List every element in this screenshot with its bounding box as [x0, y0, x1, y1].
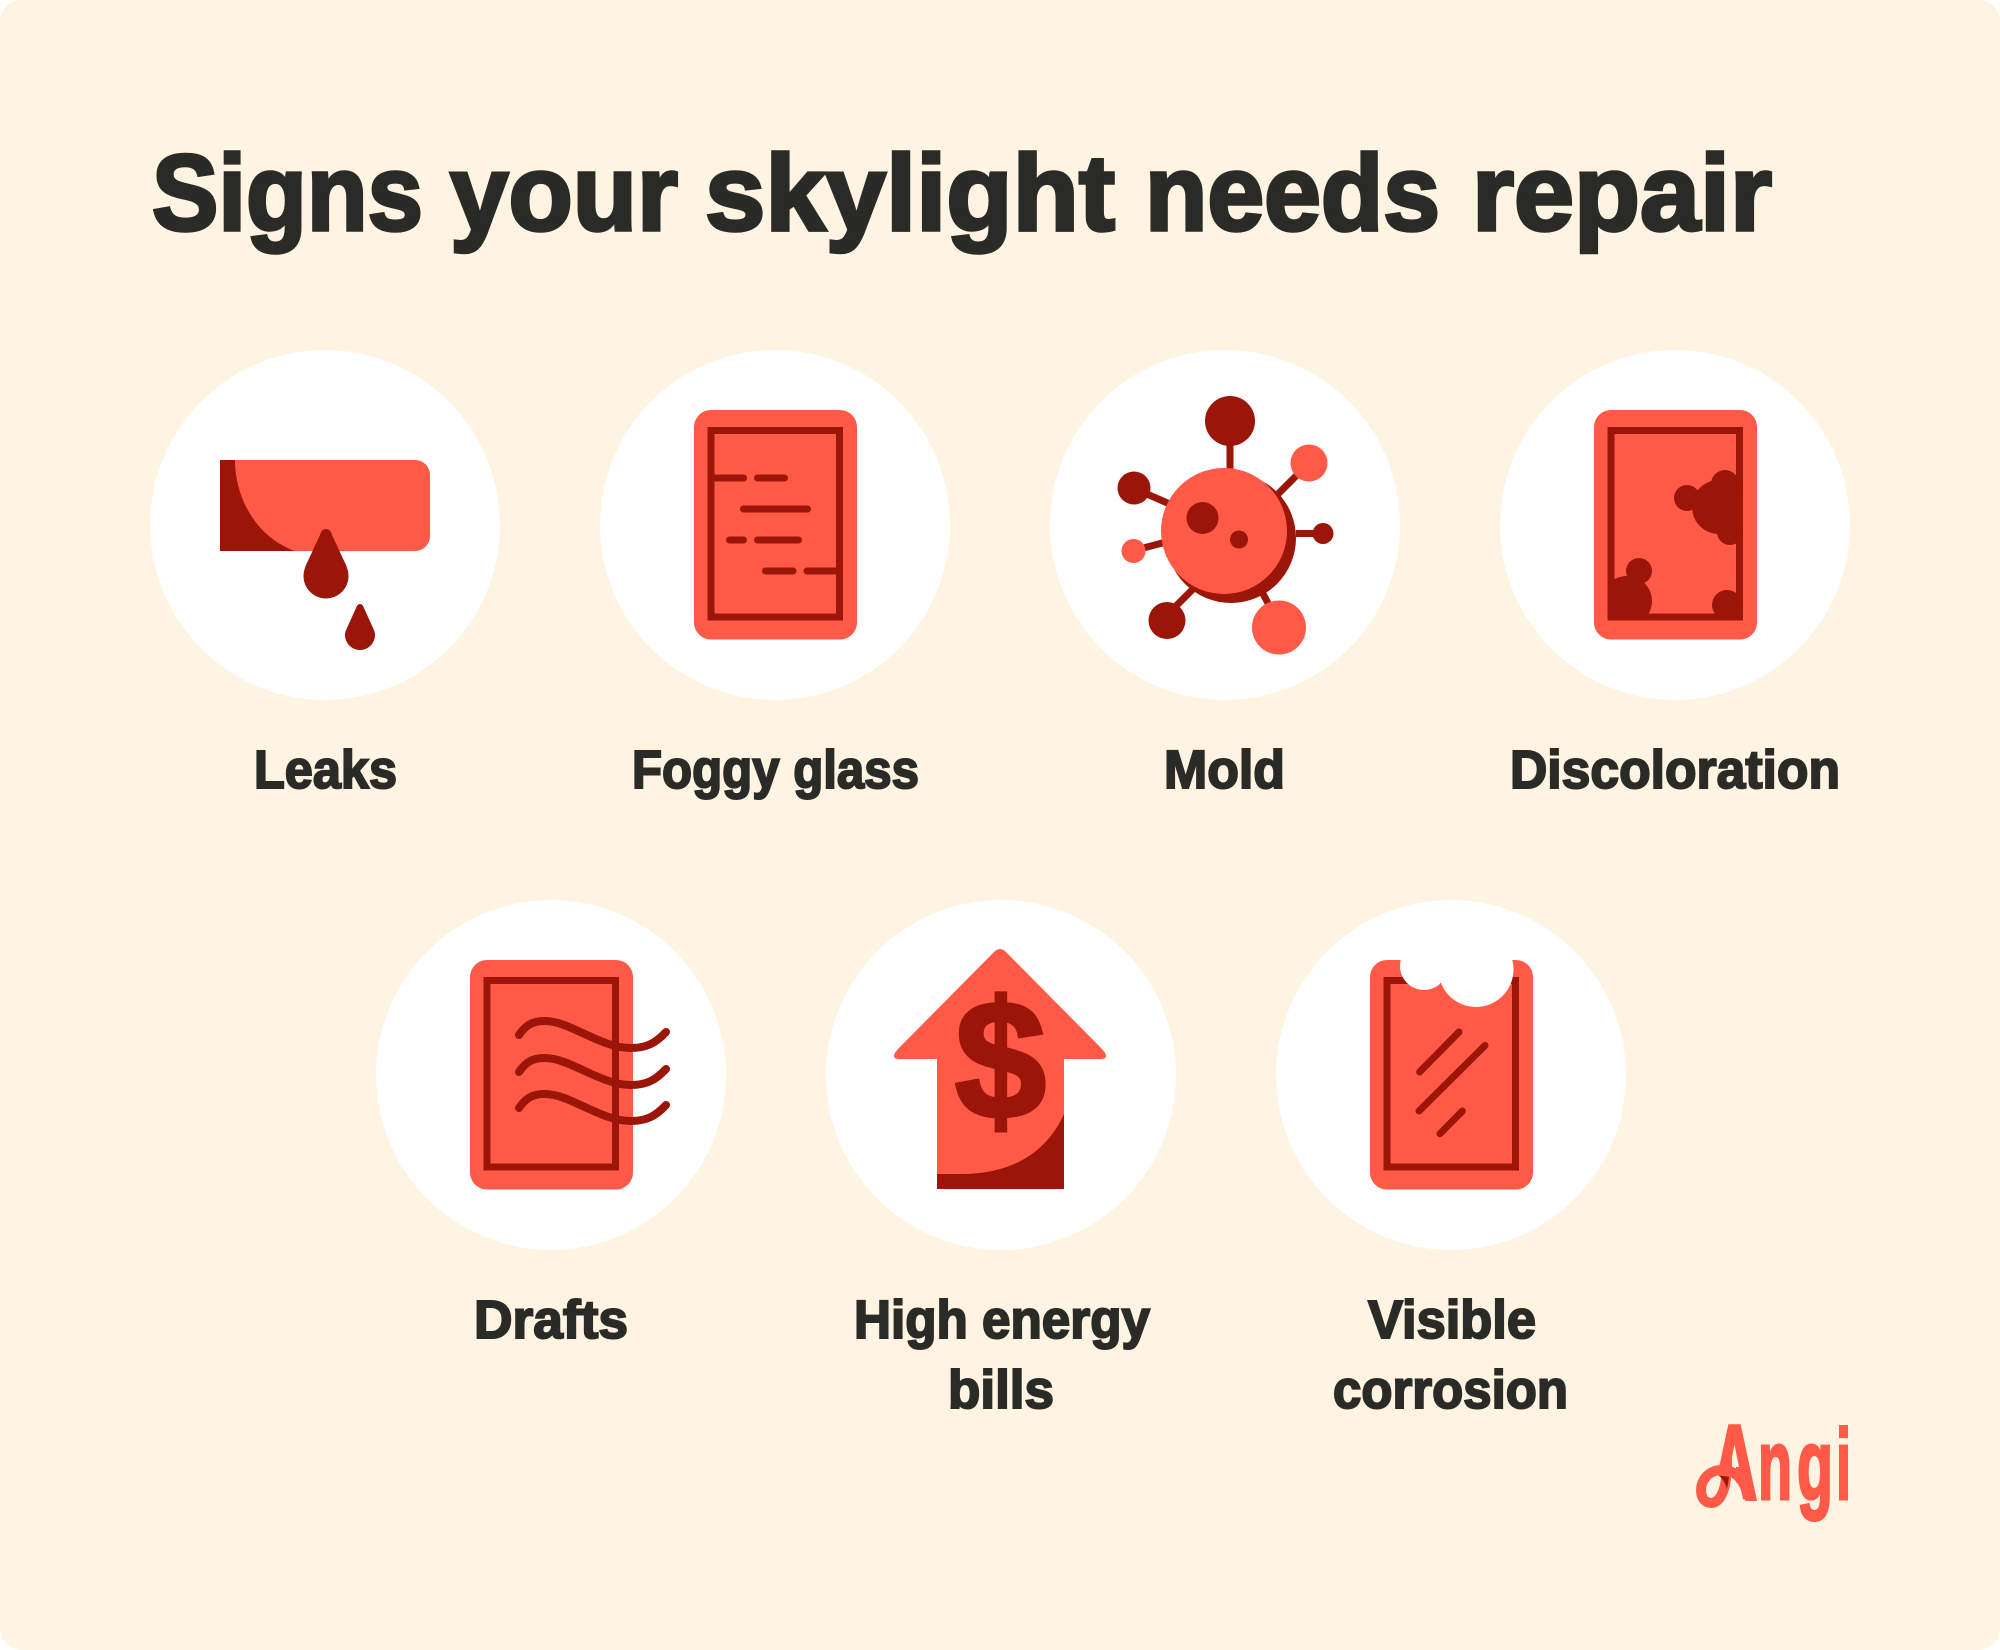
panel: mold	[1050, 350, 1400, 800]
icon circle: high energy bills	[826, 900, 1176, 1250]
icon: rising cost arrow	[894, 949, 1106, 1189]
panel: leaks	[150, 350, 500, 800]
label: visible corrosion: corrosion	[1333, 1360, 1568, 1420]
icon circle: leaks	[150, 350, 500, 700]
icon: discolored window	[1594, 410, 1757, 640]
title: Signs	[152, 132, 423, 253]
icon circle: visible corrosion	[1276, 900, 1626, 1250]
icon: leaking skylight	[220, 460, 430, 650]
title	[152, 132, 1772, 253]
icon: rising cost arrow: $	[955, 966, 1046, 1154]
logo: Angi: A	[1712, 1404, 1757, 1522]
logo: Angi: i	[1836, 1409, 1851, 1521]
label: foggy glass: Foggy glass	[632, 740, 919, 800]
icon circle: discoloration	[1500, 350, 1850, 700]
panel: visible corrosion	[1276, 900, 1626, 1420]
icon circle: foggy glass	[600, 350, 950, 700]
icon: foggy window	[694, 410, 857, 640]
label: leaks: Leaks	[254, 740, 397, 800]
label: visible corrosion: Visible	[1368, 1290, 1536, 1350]
label: high energy bills: High energy	[854, 1290, 1150, 1350]
label: mold: Mold	[1164, 740, 1285, 800]
panel: foggy glass	[600, 350, 950, 800]
logo: Angi: g	[1797, 1409, 1833, 1521]
icon: drafty window	[470, 960, 666, 1190]
icon: mold spore	[1118, 396, 1334, 654]
label: high energy bills: bills	[948, 1360, 1054, 1420]
label: drafts: Drafts	[474, 1290, 628, 1350]
icon: corroded window	[1370, 932, 1533, 1190]
logo: Angi: n	[1758, 1409, 1792, 1521]
title: your	[450, 132, 678, 253]
panel: drafts	[376, 900, 726, 1350]
icon circle: drafts	[376, 900, 726, 1250]
panel: high energy bills	[826, 900, 1176, 1420]
label: high energy bills	[854, 1290, 1150, 1420]
icon circle: mold	[1050, 350, 1400, 700]
label: visible corrosion	[1333, 1290, 1568, 1420]
logo: Angi	[1696, 1424, 1848, 1522]
title: needs	[1145, 132, 1440, 253]
title: skylight	[705, 132, 1115, 253]
panel: discoloration	[1500, 350, 1850, 800]
title: repair	[1472, 132, 1772, 253]
label: discoloration: Discoloration	[1510, 740, 1840, 800]
